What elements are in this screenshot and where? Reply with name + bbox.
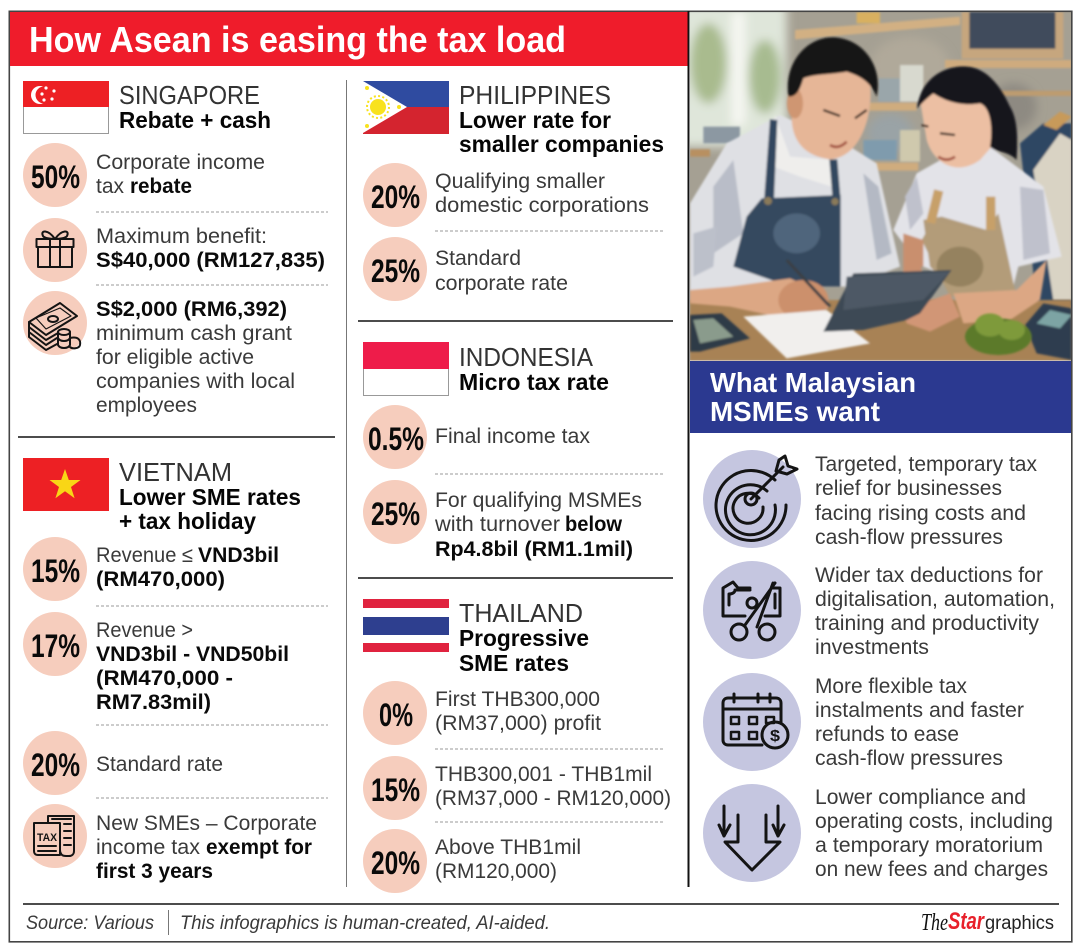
icon: down arrows: [719, 806, 784, 870]
heading: What Malaysian MSMEs want: What Malaysian: [710, 367, 916, 398]
stat: 25%: 25%: [371, 496, 420, 532]
footer: source and note: Source: Various: [26, 913, 154, 934]
item: lower compliance costs: operating costs, including: [815, 809, 1053, 833]
stat: 20%: (RM120,000): [435, 859, 557, 883]
stat: 15%: 15%: [31, 553, 80, 589]
item: flexible tax instalments: instalments and faster: [815, 698, 1024, 722]
item: cash grant with money icon: for eligible active: [96, 345, 254, 369]
stat: 17%: VND3bil - VND50bil: [96, 642, 289, 666]
stat: 15%: 15%: [371, 772, 420, 808]
item: cash grant with money icon: [23, 291, 295, 417]
flag: Singapore: [23, 81, 109, 134]
item: flexible tax instalments: More flexible tax: [815, 674, 967, 698]
item: tax exemption with document icon: income tax: [96, 835, 200, 859]
heading: Thailand: SME rates: [459, 650, 569, 676]
stat: 20%: [363, 163, 649, 227]
heading: Philippines: Lower rate for: [459, 107, 611, 133]
item: targeted tax relief: [703, 450, 1037, 549]
footer: source and note: [26, 910, 550, 935]
flag: Philippines: [363, 81, 449, 134]
stat: 20%: 20%: [31, 747, 80, 783]
stat: 0%: (RM37,000) profit: [435, 711, 601, 735]
heading: Indonesia: Micro tax rate: [459, 369, 609, 395]
item: tax exemption with document icon: exempt for: [206, 835, 313, 859]
stat: 25%: 25%: [371, 253, 420, 289]
stat: 15%: [23, 537, 279, 601]
stat: 17%: Revenue >: [96, 618, 193, 642]
stat: 25%: below: [565, 512, 622, 536]
stat: 0%: [363, 681, 601, 745]
item: targeted tax relief: cash-flow pressures: [815, 525, 1003, 549]
stat: 20%: domestic corporations: [435, 193, 649, 217]
heading: Vietnam: + tax holiday: [119, 508, 256, 534]
logo: The Star graphics: The: [921, 910, 948, 936]
stat: 20%: 20%: [371, 179, 420, 215]
stat: 50% rebate: tax: [96, 174, 124, 198]
stat: 25%: For qualifying MSMEs: [435, 488, 642, 512]
heading: Vietnam: VIETNAM: [119, 459, 232, 487]
stat: 20%: [23, 731, 223, 795]
heading: Singapore: Rebate + cash: [119, 107, 271, 133]
item: wider tax deductions: investments: [815, 635, 929, 659]
stat: 25%: Rp4.8bil (RM1.1mil): [435, 537, 633, 561]
title banner: [10, 12, 688, 66]
stat: 50% rebate: Corporate income: [96, 150, 265, 174]
stat: 25%: Standard: [435, 246, 521, 270]
panel: Vietnam: [23, 458, 328, 883]
heading: Singapore: SINGAPORE: [119, 82, 260, 110]
item: maximum benefit with gift icon: [23, 218, 325, 282]
panel: Thailand: [363, 599, 671, 893]
stat: 15%: (RM37,000 - RM120,000): [435, 786, 671, 810]
photo: shop owners with tablet: [680, 3, 1072, 361]
icon: tax document: [34, 816, 74, 856]
item: lower compliance costs: on new fees and charges: [815, 857, 1048, 881]
stat: 20%: Standard rate: [96, 752, 223, 776]
heading: Vietnam: [119, 459, 301, 534]
flag: Vietnam: [23, 458, 109, 511]
stat: 0.5%: [363, 405, 590, 469]
stat: 50% rebate: 50%: [31, 159, 80, 195]
item: flexible tax instalments: refunds to ease: [815, 722, 959, 746]
heading: Philippines: PHILIPPINES: [459, 82, 611, 110]
heading: What Malaysian MSMEs want: MSMEs want: [710, 396, 880, 427]
flag: Thailand: [363, 599, 449, 652]
icon: tax document: TAX: [37, 832, 58, 844]
heading: Thailand: Progressive: [459, 625, 589, 651]
heading: Indonesia: INDONESIA: [459, 344, 593, 372]
stat: 17%: (RM470,000 -: [96, 666, 233, 690]
item: wider tax deductions: Wider tax deductions for: [815, 563, 1043, 587]
stat: 15%: [363, 756, 671, 820]
item: tax exemption with document icon: New SMEs – Corporate: [96, 811, 317, 835]
stat: 15%: (RM470,000): [96, 567, 225, 591]
stat: 0%: First THB300,000: [435, 687, 600, 711]
item: lower compliance costs: [703, 784, 1053, 882]
heading: Thailand: THAILAND: [459, 600, 583, 628]
item: wider tax deductions: [703, 561, 1055, 659]
item: flexible tax instalments: cash-flow pressures: [815, 746, 1003, 770]
stat: 17%: [23, 612, 289, 714]
stat: 15%: Revenue ≤: [96, 543, 193, 567]
stat: 17%: 17%: [31, 628, 80, 664]
stat: 25%: corporate rate: [435, 271, 568, 295]
icon: calendar with dollar coin: [723, 694, 788, 748]
stat: 25%: with turnover: [434, 512, 560, 536]
stat: 50% rebate: [23, 143, 265, 207]
heading: Vietnam: Lower SME rates: [119, 484, 301, 510]
stat: 15%: VND3bil: [198, 543, 279, 567]
item: targeted tax relief: relief for businesses: [815, 476, 1002, 500]
stat: 0.5%: Final income tax: [435, 424, 590, 448]
item: flexible tax instalments: [703, 673, 1024, 771]
item: lower compliance costs: Lower compliance and: [815, 785, 1026, 809]
flag: Indonesia: [363, 342, 449, 396]
stat: 25%: [363, 480, 642, 561]
item: cash grant with money icon: companies with local: [96, 369, 295, 393]
stat: 50% rebate: rebate: [130, 174, 192, 198]
item: maximum benefit with gift icon: S$40,000 (RM127,835): [96, 248, 325, 272]
item: tax exemption with document icon: first 3 years: [96, 859, 213, 883]
stat: 0%: 0%: [379, 697, 413, 733]
item: targeted tax relief: facing rising costs and: [815, 501, 1026, 525]
stat: 20%: [363, 829, 581, 893]
stat: 0.5%: 0.5%: [368, 421, 424, 457]
heading: Philippines: smaller companies: [459, 131, 664, 157]
stat: 17%: RM7.83mil): [96, 690, 211, 714]
stat: 20%: Qualifying smaller: [435, 169, 605, 193]
stat: 20%: Above THB1mil: [435, 835, 581, 859]
heading: Philippines: [459, 82, 664, 157]
footer: source and note: This infographics is human-created, AI-aided.: [180, 913, 550, 934]
icon: target with arrow: [716, 456, 797, 540]
stat: 25%: [363, 237, 568, 301]
heading: Singapore: [119, 82, 271, 133]
item: flexible tax instalments: $: [770, 728, 780, 745]
panel: Philippines: [363, 81, 665, 301]
title banner: How Asean is easing the tax load: [29, 19, 566, 60]
item: tax exemption with document icon: [23, 804, 317, 883]
item: cash grant with money icon: S$2,000 (RM6,392): [96, 297, 287, 321]
logo: The Star graphics: Star: [948, 908, 985, 935]
stat: 15%: THB300,001 - THB1mil: [435, 762, 652, 786]
item: lower compliance costs: a temporary moratorium: [815, 833, 1043, 857]
item: maximum benefit with gift icon: Maximum benefit:: [96, 224, 267, 248]
icon: scissors cutting banknote: [723, 582, 780, 640]
heading: What Malaysian MSMEs want: [690, 361, 1071, 433]
stat: 20%: 20%: [371, 845, 420, 881]
panel: Indonesia: [363, 342, 665, 561]
panel: Singapore: [23, 81, 328, 417]
logo: The Star graphics: graphics: [985, 913, 1054, 934]
item: cash grant with money icon: employees: [96, 393, 197, 417]
item: cash grant with money icon: minimum cash grant: [96, 321, 292, 345]
heading: Thailand: [459, 600, 589, 676]
item: targeted tax relief: Targeted, temporary tax: [815, 452, 1037, 476]
heading: Indonesia: [459, 344, 609, 395]
item: wider tax deductions: training and productivity: [815, 611, 1039, 635]
icon: money stack and coins: [29, 303, 80, 350]
icon: gift: [36, 231, 74, 267]
item: wider tax deductions: digitalisation, automation,: [815, 587, 1055, 611]
column divider: [346, 80, 348, 887]
logo: The Star graphics: [921, 908, 1054, 936]
